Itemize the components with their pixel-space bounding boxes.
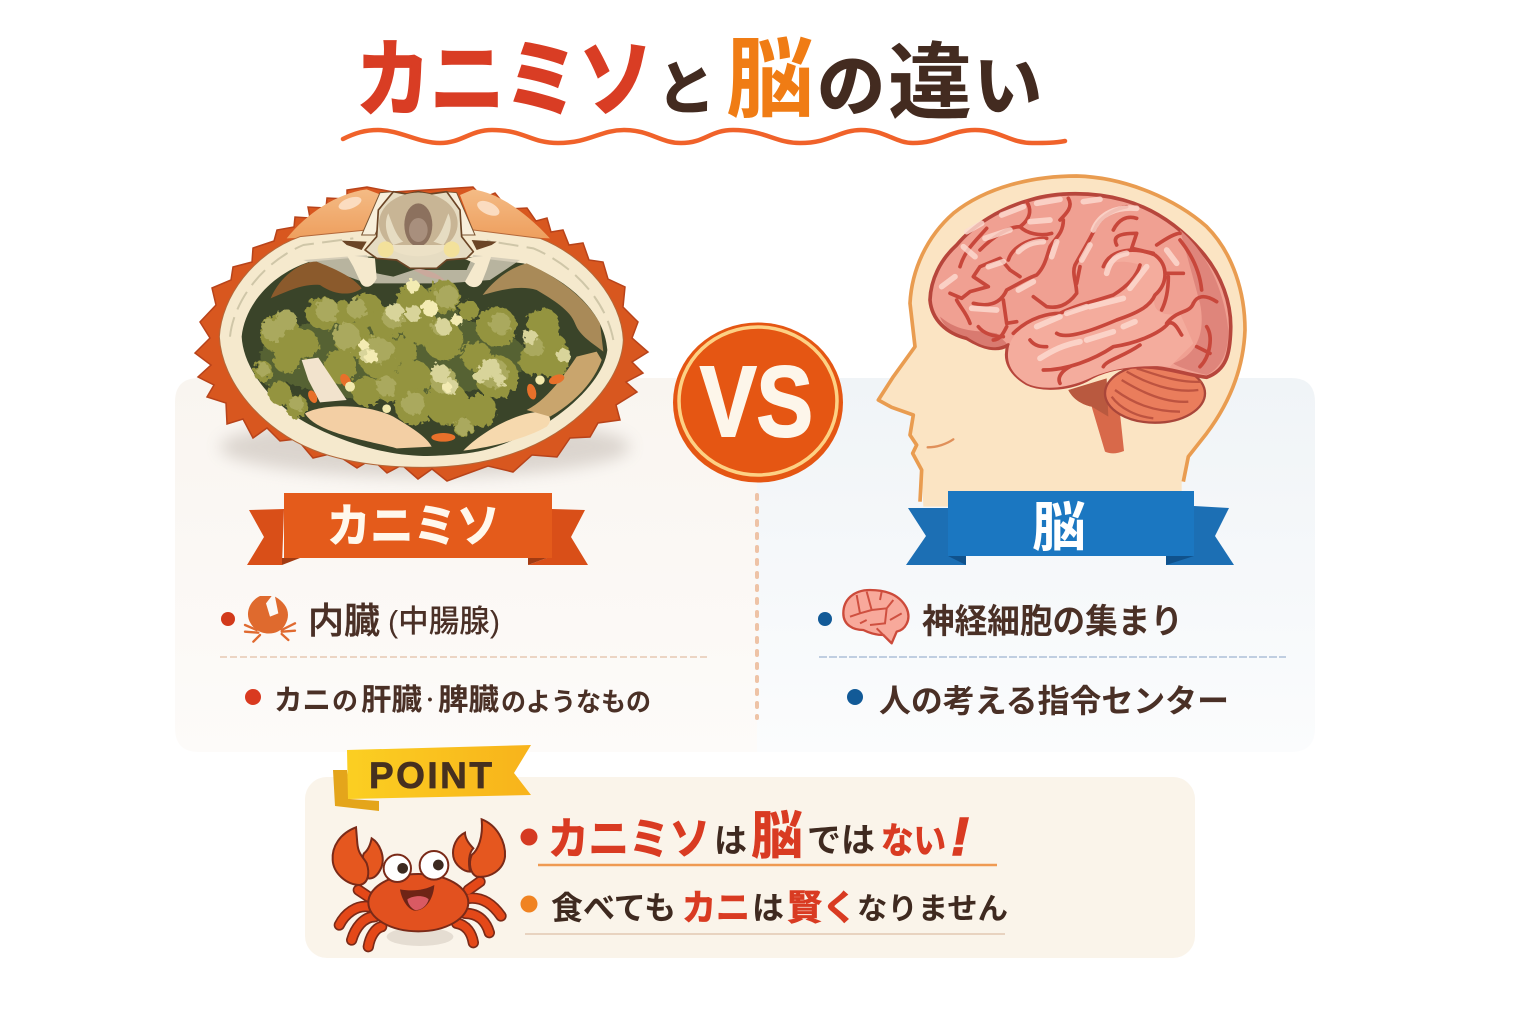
text: の: [332, 686, 358, 716]
text: 肝臓: [361, 684, 422, 717]
title: と: [657, 57, 715, 122]
bullet: [847, 689, 863, 705]
text: 人の考える指令センター: [879, 683, 1229, 719]
gyri grooves: [950, 198, 1217, 383]
headline 2: なりません: [857, 893, 1008, 926]
text: •: [428, 691, 433, 707]
bullet: [520, 896, 538, 912]
badge: POINT: POINT: [369, 755, 492, 796]
claws: [363, 838, 383, 878]
bullet: [245, 689, 261, 705]
panel: left comparison background: [175, 378, 757, 752]
ribbon: brain heading: [906, 491, 1234, 565]
eyes: [384, 855, 411, 882]
text: 脾臓: [438, 684, 499, 717]
headline 1: 脳: [751, 808, 803, 866]
bullet: [221, 612, 235, 626]
panel: right comparison background: [757, 378, 1315, 752]
brain stem: [1068, 383, 1124, 453]
headline 1: は: [714, 822, 747, 859]
headline 1: では: [807, 822, 875, 860]
head outline: [878, 176, 1245, 502]
text: のようなもの: [501, 687, 651, 717]
taupe strip under rim: [303, 255, 520, 283]
cerebrum: [930, 194, 1231, 388]
list: brain facts: [818, 590, 1286, 719]
text: カニ: [274, 685, 331, 717]
brown inner shell: [271, 262, 362, 298]
dashed divider: [220, 656, 708, 658]
text: 内臓: [308, 600, 380, 641]
head section: [365, 192, 473, 268]
headline 1: ない: [881, 820, 946, 861]
VS badge: VS: [700, 346, 813, 458]
dark cavity: [242, 257, 607, 456]
title: の: [817, 49, 885, 125]
miso clumps: [253, 280, 571, 437]
panel: point summary: [305, 745, 1195, 958]
headline 1: !: [951, 807, 969, 867]
highlights: [942, 199, 1177, 358]
bullet: [520, 828, 538, 846]
flesh pieces and orange roe: [305, 406, 432, 448]
head fill: [878, 176, 1245, 507]
cream fingers beside head: [347, 255, 377, 287]
illustration: opened crab shell with kani miso: [195, 187, 648, 481]
ribbon: kani miso heading: [247, 493, 588, 565]
VS badge: [673, 322, 843, 482]
headline 2: 食べても: [551, 890, 676, 926]
upper peach shell plates: [287, 189, 382, 238]
ribbon: brain heading: 脳: [1032, 498, 1086, 558]
headline 2: [551, 887, 1008, 928]
divider: dotted center line: [755, 495, 759, 718]
dashed divider: [819, 656, 1286, 658]
illustration: head silhouette with brain: [878, 176, 1245, 507]
title: 脳: [726, 30, 814, 129]
underline 1: [538, 864, 997, 866]
title wavy underline: [343, 130, 1065, 143]
cream rim: [219, 230, 623, 467]
title: [356, 30, 1042, 130]
illustration: smiling crab: [333, 819, 505, 947]
underline 2: [525, 933, 1005, 935]
ribbon: kani miso heading: カニミソ: [327, 500, 500, 552]
headline 2: 賢く: [787, 889, 857, 928]
text: [274, 684, 651, 717]
bullet: [818, 612, 832, 626]
headline 1: カニミソ: [548, 815, 710, 864]
title: 違: [888, 36, 972, 130]
list: kani miso facts: (中腸腺): [388, 604, 500, 639]
icon: small brain: [843, 590, 908, 643]
icon: small crab: [245, 596, 295, 642]
temporal lobe: [1008, 250, 1193, 388]
text: 神経細胞の集まり: [922, 603, 1183, 641]
cerebellum: [1105, 364, 1205, 423]
brown spines: [342, 240, 497, 250]
list: kani miso facts: [220, 596, 708, 717]
legs: [339, 882, 501, 947]
headline 2: は: [752, 890, 784, 926]
title: い: [974, 49, 1042, 125]
headline 2: カニ: [682, 887, 750, 928]
body: [368, 874, 468, 931]
cream channels beside head: [362, 192, 393, 235]
headline 1: [548, 807, 969, 867]
title: カニミソ: [356, 33, 653, 127]
badge: POINT: [333, 745, 531, 811]
mouth: [400, 885, 434, 911]
